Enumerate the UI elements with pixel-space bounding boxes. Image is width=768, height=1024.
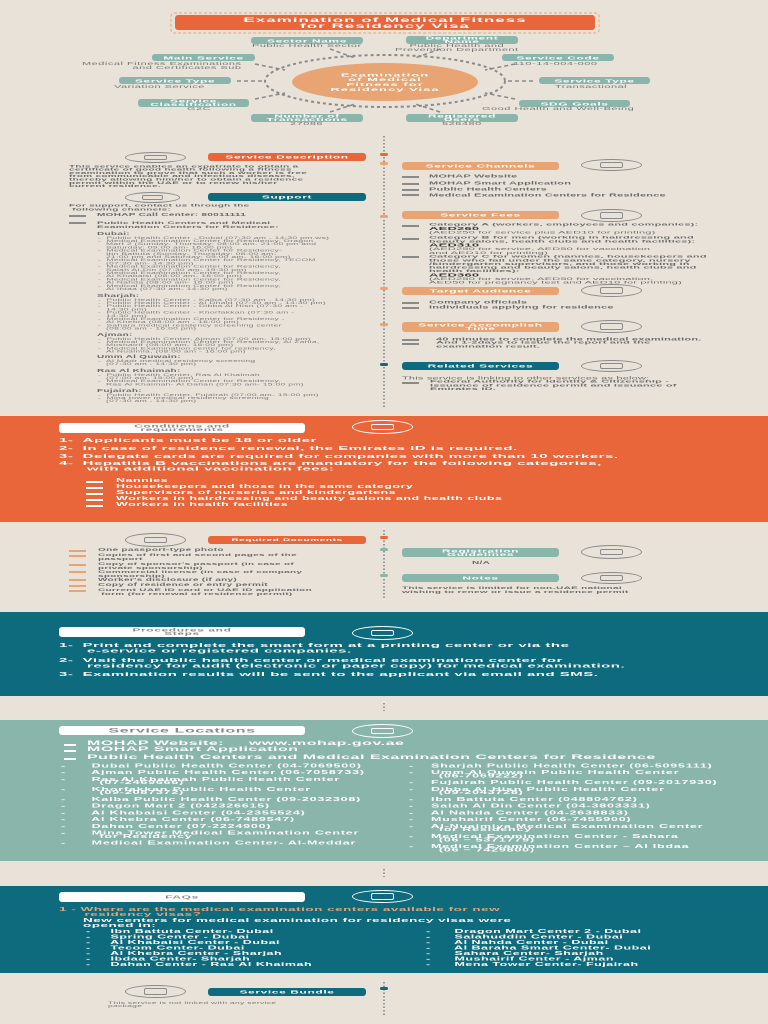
icon: notes xyxy=(581,572,642,584)
panel: service locations xyxy=(0,720,768,861)
icon: related xyxy=(581,360,642,372)
pill: service type left: Service Type xyxy=(135,78,215,83)
pill: required documents xyxy=(208,536,366,544)
locations left column: - Al Khebra Center (06-7489547) xyxy=(61,816,295,822)
info section: Saturday: 09:00 am- 16:00 pm) xyxy=(106,245,232,249)
pill: service bundle xyxy=(208,988,366,996)
panel: documents: Copies of first and second pages of the xyxy=(98,553,297,557)
panel: conditions: Housekeepers and those in the same category xyxy=(116,484,413,489)
description text: current residence. xyxy=(69,184,161,188)
locations left column: - Dahan Center (07-2224900) xyxy=(61,823,271,829)
info section: (07:30 am - 14:30 pm) xyxy=(106,399,196,403)
panel: documents: Current UAE ID card or UAE ID application xyxy=(98,588,312,592)
locations right column: - Umm Al Quwain Public Health Center xyxy=(409,769,679,775)
locations left column: - Ajman Public Health Center (06-7058733) xyxy=(61,769,365,775)
locations right column: - Al-Nuaimiya Medical Examination Center xyxy=(409,823,703,829)
answer right list: - Sahara Center- Sharjah xyxy=(426,950,604,956)
pill: fees xyxy=(402,211,559,219)
info section: AED50 for pregnancy test and AED10 for printing) xyxy=(429,281,682,285)
info section: And 1-2days to issue the report and the xyxy=(436,341,650,345)
pill: notes xyxy=(402,574,559,582)
locations main list xyxy=(64,744,76,746)
locations right column: (06 – 5371779) xyxy=(439,837,535,843)
panel: conditions: 3- Delegate cards are required for companies with more than 10 workers. xyxy=(59,453,619,460)
panel: conditions: Workers in health facilities xyxy=(116,502,288,507)
info section: 14:30 pm) xyxy=(106,307,147,311)
value: main service: Medical Fitness Examinations xyxy=(82,62,242,66)
info section: - Medical Examination center for residency, xyxy=(98,346,276,350)
documents list xyxy=(69,550,86,552)
info section: Mushairif (08:00 am- 16:00 pm) xyxy=(106,343,234,347)
locations right column: - Medical Examination Center - Sahara xyxy=(409,833,679,839)
panel: conditions: 4- Hepatitis B vaccinations are mandatory for the following categories, xyxy=(59,460,602,467)
panel: conditions: 2- In case of residence renewal, the Emirates ID is required. xyxy=(59,445,518,452)
pill: SDG xyxy=(519,100,630,107)
info section: (AED250 for service plus AED10 for printing) xyxy=(429,231,655,235)
info section: - Public Health Center - Dibba Al Hisn (07:30 am - xyxy=(98,304,303,308)
info section: - Medical Examination Center for Residency, xyxy=(98,277,281,281)
locations right column: - Mushairif Center (06-7455900) xyxy=(409,816,631,822)
info section: - Public Health Center, Fujairah (07:00 am- 15:00 pm) xyxy=(98,393,319,397)
icon: documents xyxy=(125,533,186,547)
icon: fees xyxy=(581,209,642,222)
panel: FAQs xyxy=(0,886,768,973)
locations right column: - Sharjah Public Health Center (06-5095111) xyxy=(409,763,713,769)
info section: Public Health Centers and Medical xyxy=(97,221,270,225)
icon: bundle xyxy=(125,985,186,998)
title: for Residency Visa xyxy=(300,22,470,29)
value: variation: Variation Service xyxy=(114,85,205,89)
support text: following channels: xyxy=(72,207,171,212)
locations right column: - Fujairah Public Health Center (09-2017930) xyxy=(409,780,718,785)
value: sector: Public Health Sector xyxy=(252,44,362,48)
pill: conditions: requirements xyxy=(140,427,224,432)
pill: service code xyxy=(502,54,614,61)
pill: target audience: Target Audience xyxy=(430,288,531,294)
title: Examination of Medical Fitness xyxy=(243,16,527,23)
panel: documents: Copy of sponsor's passport (in case of xyxy=(98,562,294,566)
info section: Examination Centers for Residence: xyxy=(97,225,279,229)
pill: target audience xyxy=(402,287,559,295)
pill: procedures: Procedures and xyxy=(132,627,232,632)
value: department: Prevention Department xyxy=(395,48,519,52)
info section: Issuance of residence permit and issuance of xyxy=(430,383,677,387)
description text: thereby allowing him/her to obtain a residence xyxy=(69,178,303,182)
info section: Fujairah: xyxy=(97,389,142,394)
pill: sector name xyxy=(251,37,363,44)
info section: Al Ifdaa (07:30 am- 14:30 pm) xyxy=(106,287,228,291)
answer xyxy=(83,917,511,928)
value: department: Public Health and xyxy=(409,44,504,48)
answer right list: - Mushairif Center - Ajman xyxy=(426,956,614,962)
info section: - Public Health Center - Kalba (07:30 am - 14:30 pm) xyxy=(98,298,315,302)
pill: conditions: Conditions and xyxy=(134,423,230,428)
info section: Sharjah: xyxy=(97,294,139,299)
info section: Ras Al Khaimah: xyxy=(97,369,181,374)
description text: permit within the UAE or to renew his/her xyxy=(69,181,277,185)
center ellipse: of Medical xyxy=(348,77,422,82)
info section: AED260 xyxy=(429,226,479,231)
panel: documents: private sponsorship) xyxy=(98,566,203,570)
locations right column: for Residency xyxy=(439,827,532,832)
pill: required documents: Required Documents xyxy=(231,538,343,542)
rays and dashed ring xyxy=(170,12,600,113)
panel: documents: Worker's disclosure (if any) xyxy=(98,578,237,583)
pill: service description xyxy=(208,153,366,161)
answer right list: - Salahuddin Center - Dubai xyxy=(426,934,623,940)
steps list: 1- Print and complete the smart form at a printing center or via the xyxy=(59,642,569,649)
panel: service locations: MOHAP Website: www.mohap.gov.ae xyxy=(87,740,404,747)
info section: - Medical Examination Center for Residency - xyxy=(98,317,285,321)
description text: examination to prove that such a worker is free xyxy=(69,171,307,175)
title xyxy=(175,15,595,30)
center ellipse: Residency Visa xyxy=(330,87,440,92)
pill: service code: Service Code xyxy=(516,55,600,60)
info section: (AED250 for service, AED50 for vaccination xyxy=(429,247,650,251)
answer right list: - Al Nahda Center - Dubai xyxy=(426,940,609,945)
info section: Federal Authority for Identity & Citizenship - xyxy=(430,380,669,384)
value: SDG: Good Health and Well-Being xyxy=(482,107,634,111)
icon: registration xyxy=(581,545,642,559)
locations left column: - Dubai Public Health Center (04-7069500) xyxy=(61,763,362,769)
pill: classification xyxy=(138,99,249,107)
answer left list: - Tecom Center- Dubai xyxy=(86,945,245,951)
info section: Individuals applying for residence xyxy=(429,305,614,310)
info section: - Medical Examination Center for Residency, xyxy=(98,271,281,275)
info section: - Public Health Center, Ras Al Khaimah xyxy=(98,373,260,377)
pill: main service: Main Service xyxy=(163,55,244,60)
audience list xyxy=(402,302,419,304)
locations left column: (07-2469666) xyxy=(99,780,184,785)
schedules list: Dubai: xyxy=(97,232,130,237)
info section: (07:30 am- 14:30 pm) xyxy=(106,261,194,265)
pill: FAQs xyxy=(59,892,305,902)
fees list xyxy=(402,225,419,226)
pill: service type right xyxy=(539,77,650,84)
answer right list: - Dragon Mart Center 2 - Dubai xyxy=(426,929,641,934)
info section: - Public Health Center, Ajman (07:00 am- 15:00 pm) xyxy=(98,337,311,341)
info section: hairdressing and beauty salons, health clubs and xyxy=(429,266,697,270)
panel: documents: passport xyxy=(98,557,143,561)
info section: Mart 2 (Sunday- Thursday: 08:00 am- 21:00 pm and xyxy=(106,242,316,246)
icon: audience xyxy=(581,284,642,297)
related text: This service is linking to other services as below: xyxy=(402,376,649,381)
panel: procedures: residency for audit (electronic or paper copy) for medical examination. xyxy=(87,663,625,669)
info section: - Medical Examination Center for Residency, xyxy=(98,284,281,288)
info section: - Medical Examination Center for Residency, Dragon xyxy=(98,239,313,243)
pill: sector name: Sector Name xyxy=(267,38,347,43)
panel: procedures xyxy=(0,612,768,696)
pill: accomplish time: Service Accomplish xyxy=(418,322,543,327)
info section: - Medical Examination Center for Residency- xyxy=(98,248,282,252)
panel: conditions: Nannies xyxy=(116,478,168,483)
support text xyxy=(69,204,250,212)
icon: location xyxy=(352,724,413,738)
answer right list: - Mena Tower Center- Fujairah xyxy=(426,961,639,967)
question xyxy=(59,906,500,917)
pill: service description: Service Description xyxy=(225,154,349,160)
answer left list: - Spring Center - Dubai xyxy=(86,934,250,940)
info section: - Al Madr medical residency screening xyxy=(98,359,255,363)
panel: documents: One passport-type photo xyxy=(98,548,224,553)
locations left column: - Khorfakkan Public Health Center xyxy=(61,786,311,792)
value: G2C: G2C xyxy=(187,107,211,111)
info section: Ras Al Khaimah- Al Dahan (07:30 am- 15:00 pm) xyxy=(106,382,304,386)
answer right list xyxy=(426,929,651,967)
locations right column: - Al Nahda Center (04-2638833) xyxy=(409,810,629,816)
panel: service locations: MOHAP Smart Application xyxy=(87,746,299,753)
pill: registration xyxy=(402,548,559,557)
value: department xyxy=(395,44,519,52)
panel: conditions: Supervisors of nurseries and kindergartens xyxy=(116,490,396,495)
notes text xyxy=(402,586,629,594)
center ellipse xyxy=(292,63,478,101)
locations left column: (09-2087372) xyxy=(99,790,184,796)
info section: Ajman: xyxy=(97,333,133,338)
pill: service bundle: Service Bundle xyxy=(239,989,335,995)
panel: service bundle xyxy=(108,982,388,1015)
pill: related services: Related Services xyxy=(428,363,533,369)
panel: documents: sponsorship) xyxy=(98,574,165,578)
locations right column: - Medical Examination Center – Al Ibdaa xyxy=(409,843,689,849)
locations left column: - Medical Examination Center- Al-Meddar xyxy=(61,840,356,846)
locations right column: (06-7069222) xyxy=(439,773,524,779)
info section: Public Health Centers xyxy=(429,187,547,192)
info section: Al Nahda (08:00 am- 16:00 pm) xyxy=(106,280,234,284)
locations right column: (09-2043728) xyxy=(439,790,524,796)
steps list: e-service or registered companies. xyxy=(87,648,352,654)
locations left column: - Ras Al Khaimah Public Health Center xyxy=(61,776,340,782)
info section: - Public Health Center - Dubai (07:30 am - 14:30 pm.ws) xyxy=(98,236,329,240)
panel: conditions xyxy=(0,416,768,522)
panel: documents: Commercial license (in case of company xyxy=(98,570,302,574)
pill: procedures: Steps xyxy=(164,631,200,636)
pill: SDG: SDG Goals xyxy=(540,101,609,106)
question: residency visas? xyxy=(84,911,201,917)
notes text: This service is limited for non-UAE national xyxy=(402,586,622,590)
value: code: 110-14-004-000 xyxy=(513,62,597,66)
pill: service channels: Service Channels xyxy=(426,163,535,169)
description text: This service enables an expatriate to obtain a xyxy=(69,165,298,168)
panel: documents: Copy of residence or entry permit xyxy=(98,583,268,588)
question: 1 - Where are the medical examination centers available for new xyxy=(59,906,500,912)
info section: Category B for men (working in hairdressing and xyxy=(429,236,694,240)
icon: description xyxy=(125,152,186,163)
value: transactional: Transactional xyxy=(555,85,627,89)
info section: - Medical Examination Center for Residency, Al Zahia, xyxy=(98,340,320,344)
icon: channels xyxy=(581,159,642,171)
pill: service type right: Service Type xyxy=(554,78,635,83)
channels list xyxy=(402,176,419,178)
info section: - Public Health Center - Al Dhaid (07:30 am - 14:30 pm) xyxy=(98,301,326,305)
value: transactions: 27086 xyxy=(290,122,323,126)
info section: AED310 xyxy=(429,243,479,248)
locations left column: - Mina Tower Medical Examination Center xyxy=(61,830,359,836)
panel: documents xyxy=(69,530,642,598)
info section: - Mina tower medical residency screening xyxy=(98,396,269,400)
answer left list: - Al Khabaisi Center - Dubai xyxy=(86,940,280,945)
steps list xyxy=(59,642,569,654)
info section: AED360 xyxy=(429,272,479,277)
locations left column xyxy=(61,763,365,846)
conditions list: 1- Applicants must be 18 or older xyxy=(59,437,317,444)
pill: registration: Guidelines xyxy=(447,552,514,557)
pill: service channels xyxy=(402,162,559,170)
value: main service: and Certificates Sub xyxy=(132,66,242,70)
info section: MOHAP Smart Application xyxy=(429,181,571,186)
answer right list: - Al Baraha Smart Center- Dubai xyxy=(426,945,651,951)
pill: related services xyxy=(402,362,559,370)
description text xyxy=(69,165,307,188)
pill: procedures xyxy=(59,627,305,637)
info section: those who fall under the same category, nursery xyxy=(429,258,691,262)
info section: Umm Al Quwain: xyxy=(97,355,181,360)
locations left column: - Kalba Public Health Center (09-2032308) xyxy=(61,796,361,802)
panel: conditions: Workers in hairdressing and beauty salons and health clubs xyxy=(116,496,503,501)
pill: service type left xyxy=(119,77,231,84)
locations left column: for Residency xyxy=(99,833,193,839)
pill: accomplish time xyxy=(402,322,559,332)
icon: conditions xyxy=(352,420,413,434)
pill: locations xyxy=(59,726,305,735)
info section: (07:30 am - 14:30 pm) xyxy=(106,362,196,366)
value: main service xyxy=(82,62,242,70)
registration text: N/A xyxy=(472,561,490,566)
info section: - Public Health Center - Khorfakkan (07:30 am - xyxy=(98,310,294,314)
info section: - Medical Examination Center for Residency, xyxy=(98,379,281,383)
icon: support xyxy=(125,192,180,203)
center ellipse: Fitness for xyxy=(346,82,424,87)
time list xyxy=(402,339,419,340)
description text: from communicable and infectious diseases, xyxy=(69,175,295,178)
answer left list: - Dahan Center - Ras Al Khaimah xyxy=(86,961,312,967)
info section: (AED250 for service, AED50 for vaccination, xyxy=(429,277,653,281)
info section: Category A (workers, employees and companies): xyxy=(429,223,698,227)
pill: transactions xyxy=(251,114,363,122)
answer: New centers for medical examination for residency visas were xyxy=(83,917,511,923)
pill: support: Support xyxy=(262,194,312,200)
header section xyxy=(82,12,650,126)
info section: (07:00 am- 15:00 pm) xyxy=(106,376,194,380)
info section: Ibn Battuta (Sunday- Thursday: 08:00 am- xyxy=(106,252,277,256)
locations left column: - Dragon Mart 2 (042326615) xyxy=(61,803,270,809)
sub list xyxy=(86,481,103,482)
info section: Salah Al-Din (07:30 am- 19:30 pm) xyxy=(106,268,247,272)
value: users: 526480 xyxy=(442,122,482,126)
panel: service locations: Public Health Centers and Medical Examination Centers for Residence xyxy=(87,754,656,761)
info section: health facilities): xyxy=(429,269,520,273)
info section: Company officials xyxy=(429,300,527,305)
info section: MOHAP Call Center: 80011111 xyxy=(97,213,246,218)
pill: department xyxy=(406,36,518,44)
info section: examination result. xyxy=(436,344,540,348)
answer left list: - Ibdaa Center- Sharjah xyxy=(86,956,250,962)
pill: support xyxy=(208,193,366,201)
info section: Al Khabaisi (08:00 am- 16:00 pm) xyxy=(106,274,242,278)
pill: main service xyxy=(152,54,255,61)
description text: certificate of good health following a fitness xyxy=(69,168,292,172)
pill: conditions xyxy=(59,423,305,433)
info section: Al Nuaimia, (08:00 am - 16:00 pm) xyxy=(106,349,246,353)
icon: steps xyxy=(352,626,413,640)
locations left column: - Al Khabaisi Center (04-2355524) xyxy=(61,810,306,816)
info section: MOHAP Website xyxy=(429,174,517,179)
bundle text: package xyxy=(108,1004,142,1008)
info section: and AED10 for printing) xyxy=(429,251,548,255)
locations right column: - Dibba Al Hisn Public Health Center xyxy=(409,786,665,792)
locations right column: - Salah Al Din Center (04-3803331) xyxy=(409,803,651,809)
pill: notes: Notes xyxy=(462,575,499,581)
bundle text: This service is not linked with any service xyxy=(108,1001,276,1005)
center ellipse: Examination xyxy=(341,72,429,77)
info section: beauty salons, health clubs and health facilities): xyxy=(429,239,695,243)
answer: opened in: xyxy=(83,922,156,928)
panel: documents: form (for renewal of residence permit) xyxy=(101,592,293,596)
pill: accomplish time: Time xyxy=(465,326,496,331)
answer left list: - Ibn Battuta Center- Dubai xyxy=(86,929,274,934)
locations right column xyxy=(409,763,718,853)
locations right column: (06 – 7429800) xyxy=(439,847,535,853)
info section: Category C for women (nannies, housekeepers and xyxy=(429,255,707,259)
info section: 40 minutes to complete the medical examination. xyxy=(436,337,702,342)
info section: 21:00 pm and Saturday: 09:00 am- 16:00 pm) xyxy=(106,255,291,259)
bundle text xyxy=(108,1001,276,1008)
pill: locations: Service Locations xyxy=(108,727,256,734)
info section: (08:00 am - 16:00 pm) xyxy=(106,326,196,330)
info section: /kindergarten supervisors, and those working in xyxy=(429,262,690,266)
info section: Emirates ID. xyxy=(430,387,496,391)
panel: procedures: 3- Examination results will be sent to the applicant via email and SMS. xyxy=(59,671,598,678)
pill: users xyxy=(406,114,518,122)
info section: - Medical Examination Center for Residency, TECOM xyxy=(98,258,316,262)
info section: - Sahara medical residency screening center xyxy=(98,323,282,327)
locations right column: - Ibn Battuta Center (048804762) xyxy=(409,796,638,802)
info section: 14:30 pm) xyxy=(106,314,147,318)
support text: For support, contact us through the xyxy=(69,204,250,208)
pill: FAQs: FAQs xyxy=(165,894,199,900)
info section: - Medical Examination Center for Residency, xyxy=(98,264,281,268)
panel: conditions: with additional vaccination fees: xyxy=(87,466,334,472)
notes text: wishing to renew or issue a residence permit xyxy=(402,590,629,594)
info section xyxy=(69,136,707,407)
info section: Al Khebra (08:00 am - 16:00 pm) xyxy=(106,320,239,324)
info section: Medical Examination Centers for Residence xyxy=(429,193,666,198)
answer left list: - Al Khebra Center - Sharjah xyxy=(86,950,282,956)
panel: procedures: 2- Visit the public health center or medical examination center for xyxy=(59,657,563,664)
answer left list xyxy=(86,929,312,967)
icon: clock xyxy=(581,320,642,333)
icon: faq xyxy=(352,890,413,903)
pill: fees: Service Fees xyxy=(440,212,521,218)
